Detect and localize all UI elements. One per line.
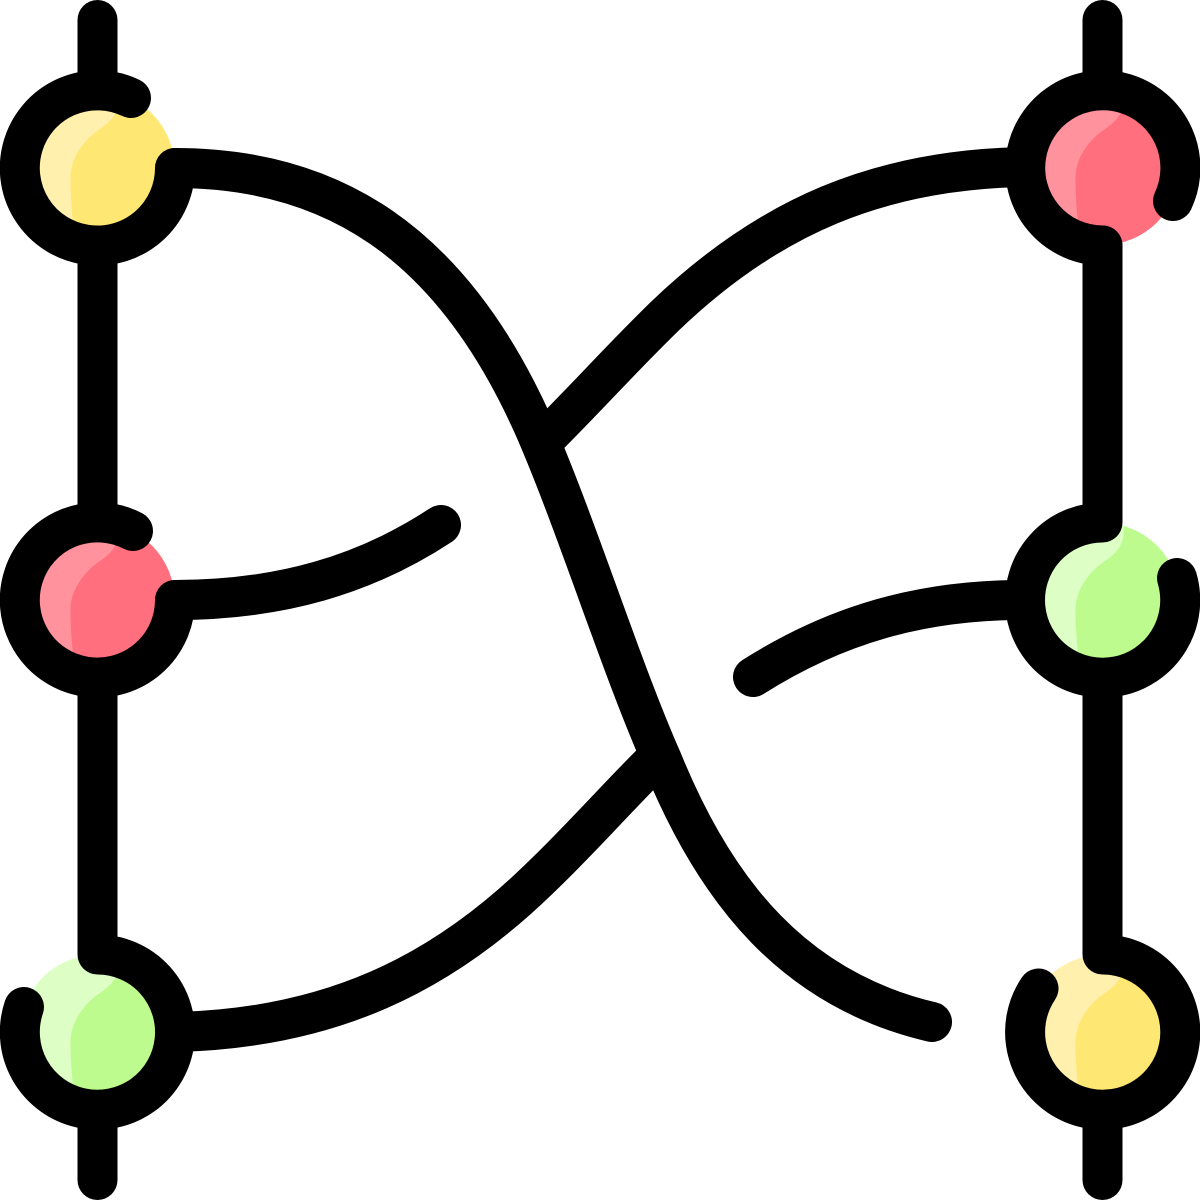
curve from bottom left node to crossing <box>177 763 652 1032</box>
short curve from middle left node <box>175 525 441 600</box>
main curve from top left to bottom right <box>175 168 932 1022</box>
node fill: bottom left green <box>20 955 174 1109</box>
right vertical line and rings <box>1025 20 1180 1180</box>
node fill: top right red <box>1025 91 1180 245</box>
node fill: middle left red <box>20 523 174 677</box>
node fill: bottom right yellow <box>1025 955 1180 1109</box>
left vertical line and rings <box>20 20 175 1180</box>
short curve from middle right node <box>753 600 1023 677</box>
node fill: middle right green <box>1025 523 1180 677</box>
node fill: top left yellow <box>20 91 174 245</box>
curve from top right node to crossing <box>548 167 1023 436</box>
